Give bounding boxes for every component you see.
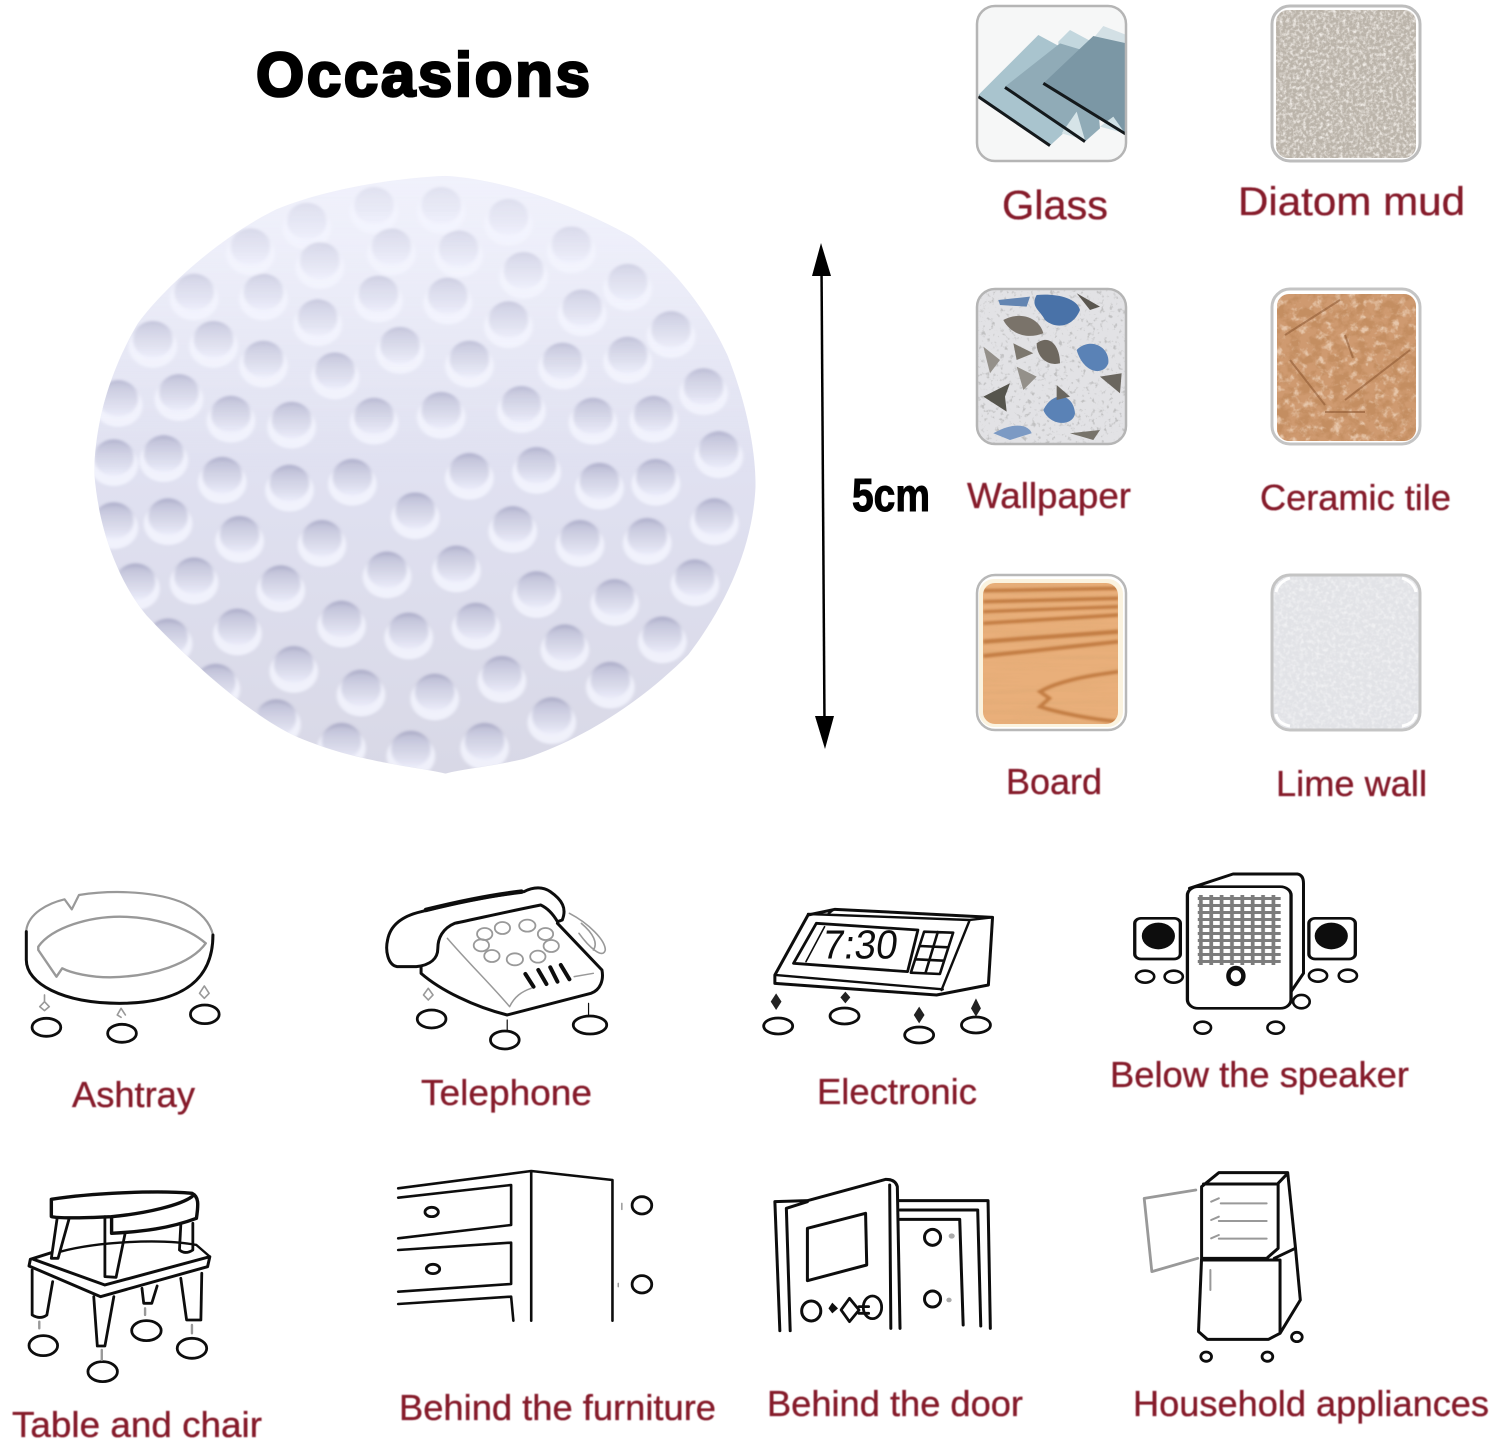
icon: telephone bbox=[387, 888, 607, 1049]
label: Diatom mud: Diatom mud bbox=[1238, 180, 1465, 224]
icon: behind the furniture bbox=[398, 1171, 652, 1321]
label: Lime wall: Lime wall bbox=[1276, 763, 1427, 804]
tile: diatom mud bbox=[1271, 5, 1423, 163]
label: Table and chair: Table and chair bbox=[12, 1404, 262, 1445]
icon: speaker bbox=[1135, 874, 1357, 1034]
label: Below the speaker: Below the speaker bbox=[1110, 1054, 1409, 1095]
label: Board: Board bbox=[1006, 761, 1102, 802]
label: Ceramic tile: Ceramic tile bbox=[1260, 477, 1451, 518]
icon: ashtray bbox=[26, 892, 219, 1042]
label: Electronic: Electronic bbox=[817, 1071, 977, 1112]
panel: compatible surfaces bbox=[967, 5, 1465, 804]
product photo: dimpled round bumper bbox=[90, 170, 766, 778]
icon: electronic clock bbox=[764, 909, 993, 1043]
label: Ashtray: Ashtray bbox=[72, 1074, 195, 1115]
icon: household appliance bbox=[1144, 1173, 1302, 1361]
title: Occasions bbox=[256, 41, 590, 110]
dimension label: 5cm: 5cm bbox=[852, 469, 930, 521]
label: Behind the furniture: Behind the furniture bbox=[399, 1387, 716, 1428]
tile: lime wall bbox=[1271, 574, 1423, 732]
tile: ceramic tile bbox=[1271, 288, 1423, 446]
label: Wallpaper: Wallpaper bbox=[967, 475, 1131, 516]
tile: glass bbox=[976, 5, 1128, 163]
icon: behind the door bbox=[775, 1179, 990, 1331]
label: Behind the door: Behind the door bbox=[767, 1383, 1023, 1424]
label: Telephone: Telephone bbox=[421, 1072, 592, 1113]
tile: wallpaper bbox=[976, 288, 1128, 446]
arrow: size dimension bbox=[812, 243, 834, 749]
icon: table and chair bbox=[29, 1192, 210, 1382]
tile: board bbox=[976, 574, 1128, 732]
label: Glass: Glass bbox=[1002, 182, 1108, 228]
label: Household appliances: Household appliances bbox=[1133, 1383, 1489, 1424]
icon: electronic clock: 7:30 bbox=[820, 921, 901, 967]
